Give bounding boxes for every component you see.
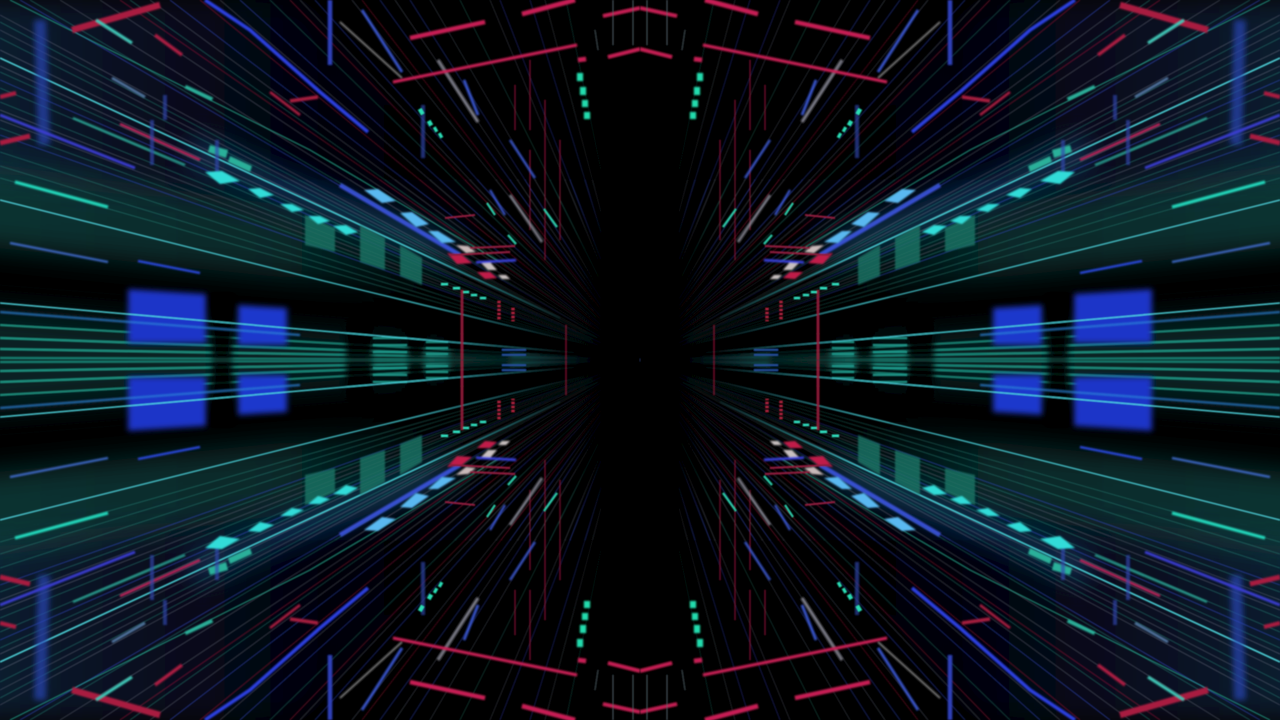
bottom-right quadrant mirror <box>640 340 1280 720</box>
long cyan line upper <box>0 58 560 318</box>
teal diagonal left <box>73 118 185 165</box>
blurred blue column <box>40 20 44 145</box>
radial lines: teal <box>0 0 640 360</box>
horizontal teal stripes <box>0 325 600 360</box>
teal cluster <box>185 85 252 172</box>
bright cyan horizontal line <box>0 303 580 353</box>
dark gaps between stripes <box>212 298 510 360</box>
radial lines: grey <box>0 0 640 360</box>
top-right quadrant mirror <box>640 0 1280 380</box>
red perspective beams <box>393 0 640 82</box>
long cyan line lower <box>0 200 580 343</box>
glow: teal band <box>0 150 500 300</box>
top-left quadrant <box>0 0 640 380</box>
thick blue under dashes <box>340 185 460 255</box>
red small posts <box>499 301 513 321</box>
teal dots row <box>441 283 486 299</box>
teal chips inner <box>487 203 557 244</box>
darken upper right of quadrant <box>200 0 640 180</box>
blue diagonal short streaks <box>362 10 535 215</box>
pale blue dashes upper left <box>112 78 145 97</box>
faint top centre lines <box>595 0 633 50</box>
red vertical thin lines <box>515 60 566 360</box>
blue streak two <box>138 261 200 273</box>
grey diagonal streaks <box>340 22 542 242</box>
blue panel: inner <box>238 305 287 345</box>
fade toward vanishing point <box>340 185 640 360</box>
glow: lower teal wash <box>0 300 540 380</box>
blue streak one <box>10 243 108 262</box>
red vertical post <box>461 290 463 360</box>
light blue dashes <box>364 189 456 243</box>
red streaks <box>0 5 318 160</box>
teal square dots column <box>577 73 590 119</box>
bottom-left quadrant mirror <box>0 340 640 720</box>
teal diagonal dots <box>418 108 443 138</box>
cyan dashes <box>205 171 358 235</box>
radial lines: red <box>120 0 640 360</box>
central solid black <box>601 58 640 368</box>
teal and white dash top left <box>96 20 132 43</box>
blue panel: outer <box>128 289 206 343</box>
radial lines: blue <box>0 0 640 360</box>
blue horizontal line <box>0 312 300 335</box>
glow: bright diagonal <box>190 150 460 255</box>
teal band streak <box>15 182 108 207</box>
blue faint verticals <box>152 95 423 175</box>
pale and red chips <box>447 245 516 279</box>
long teal line <box>10 0 500 262</box>
blue vertical bar <box>328 0 332 65</box>
central black column <box>574 0 640 360</box>
translucent teal blocks <box>305 215 422 285</box>
red horizontal stubs near centre <box>445 215 515 255</box>
teal stripe blocks near centre <box>373 337 526 356</box>
glow: upper haze <box>0 0 540 240</box>
blue diagonal left <box>0 115 135 168</box>
thick blue diagonal bar <box>205 0 368 132</box>
